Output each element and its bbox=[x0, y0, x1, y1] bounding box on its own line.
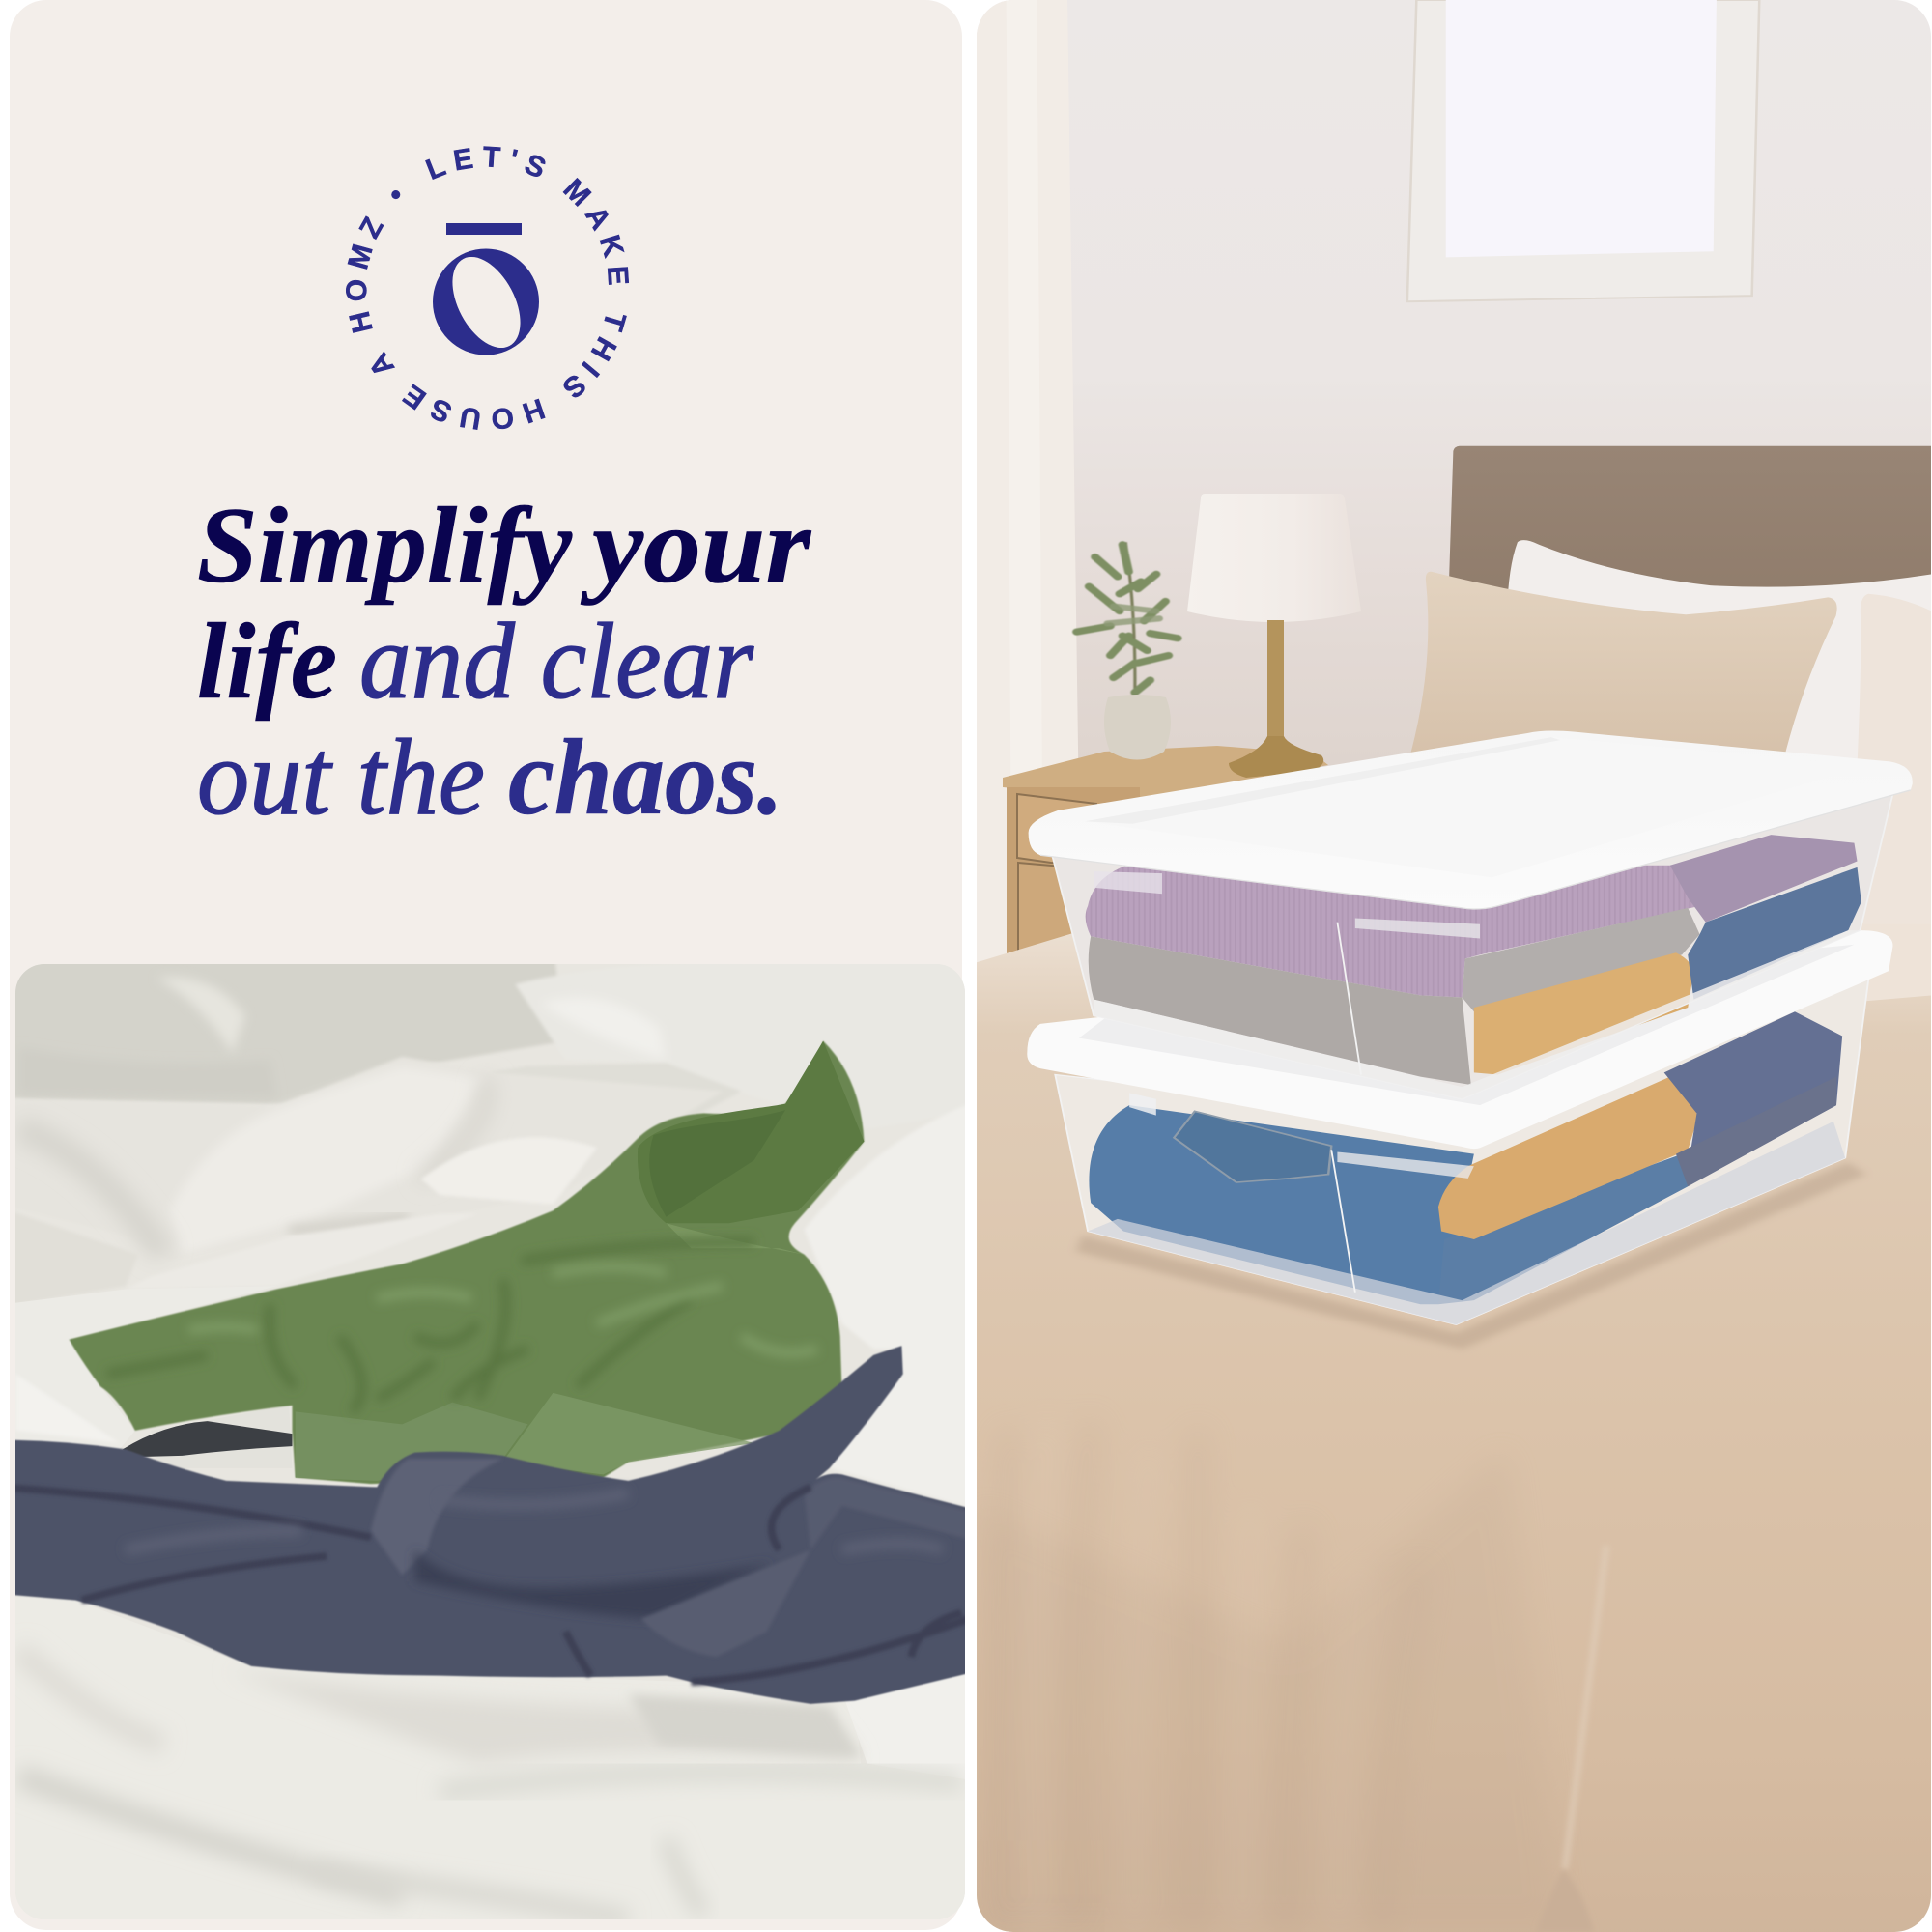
storage box: lower bbox=[1027, 930, 1892, 1324]
folded mauve garment bbox=[1670, 835, 1858, 923]
beige pillow bbox=[1409, 572, 1837, 759]
hanger bbox=[123, 1421, 292, 1457]
photo: tidy bedroom with storage boxes bbox=[975, 0, 1932, 1932]
upper box body bbox=[1052, 794, 1892, 1099]
bed crease bbox=[1565, 1546, 1606, 1869]
panel: left beige card bbox=[10, 0, 962, 1930]
green t-shirt bbox=[70, 1041, 864, 1484]
folded blue garment bbox=[1688, 867, 1861, 1000]
right cushion bbox=[1858, 594, 1931, 924]
photo: messy bed with clothes bbox=[0, 947, 985, 1932]
folded purple sweater bbox=[1086, 866, 1703, 998]
heading word life: life bbox=[197, 602, 337, 722]
table lamp bbox=[1187, 494, 1361, 778]
lower box lid bbox=[1027, 930, 1892, 1149]
folded denim bbox=[1089, 1105, 1688, 1304]
translucent box front bbox=[1052, 794, 1892, 1099]
plant pot bbox=[1104, 695, 1171, 759]
folded navy garment bbox=[1664, 1011, 1842, 1182]
upper box lid bbox=[1029, 730, 1913, 909]
lamp shade bbox=[1187, 494, 1361, 622]
folded mustard sweater bbox=[1474, 952, 1693, 1074]
storage box: upper bbox=[1029, 730, 1913, 1099]
logo: circular badge bbox=[346, 146, 630, 430]
lamp stem bbox=[1267, 620, 1284, 746]
curtain bbox=[977, 409, 1078, 962]
heading word Simplify: Simplify bbox=[197, 486, 573, 606]
heading words out the: out the bbox=[197, 718, 485, 838]
nightstand bbox=[1003, 746, 1328, 961]
heading: Simplify your life and clear out the chaos bbox=[197, 486, 812, 838]
bed bbox=[975, 926, 1932, 1932]
potted plant bbox=[1077, 542, 1178, 759]
folded mustard sweater bbox=[1438, 1077, 1697, 1239]
logo letter o bbox=[433, 245, 539, 359]
bedding: rumpled sheets bbox=[0, 947, 985, 1932]
translucent box front bbox=[1055, 975, 1869, 1324]
bed fabric folds bbox=[977, 1420, 1606, 1932]
wall picture frame bbox=[1407, 0, 1759, 301]
headboard bbox=[1449, 446, 1931, 589]
heading word your: your bbox=[580, 486, 812, 606]
logo macron bar bbox=[446, 223, 522, 235]
navy clothing bbox=[0, 1346, 985, 1704]
lower box body bbox=[1055, 975, 1869, 1324]
heading words and clear: and clear bbox=[359, 602, 753, 722]
heading word chaos: chaos. bbox=[508, 718, 783, 838]
white pillow bbox=[1508, 540, 1931, 759]
folded grey sweater bbox=[1089, 908, 1700, 1085]
wall bbox=[1067, 0, 1931, 767]
box shadow on bed bbox=[1076, 1162, 1866, 1350]
logo ring text: LET'S MAKE THIS HOUSE A HOMZ • bbox=[346, 146, 630, 430]
lamp base bbox=[1229, 736, 1323, 778]
pale bed sheet edge bbox=[1861, 924, 1932, 1002]
